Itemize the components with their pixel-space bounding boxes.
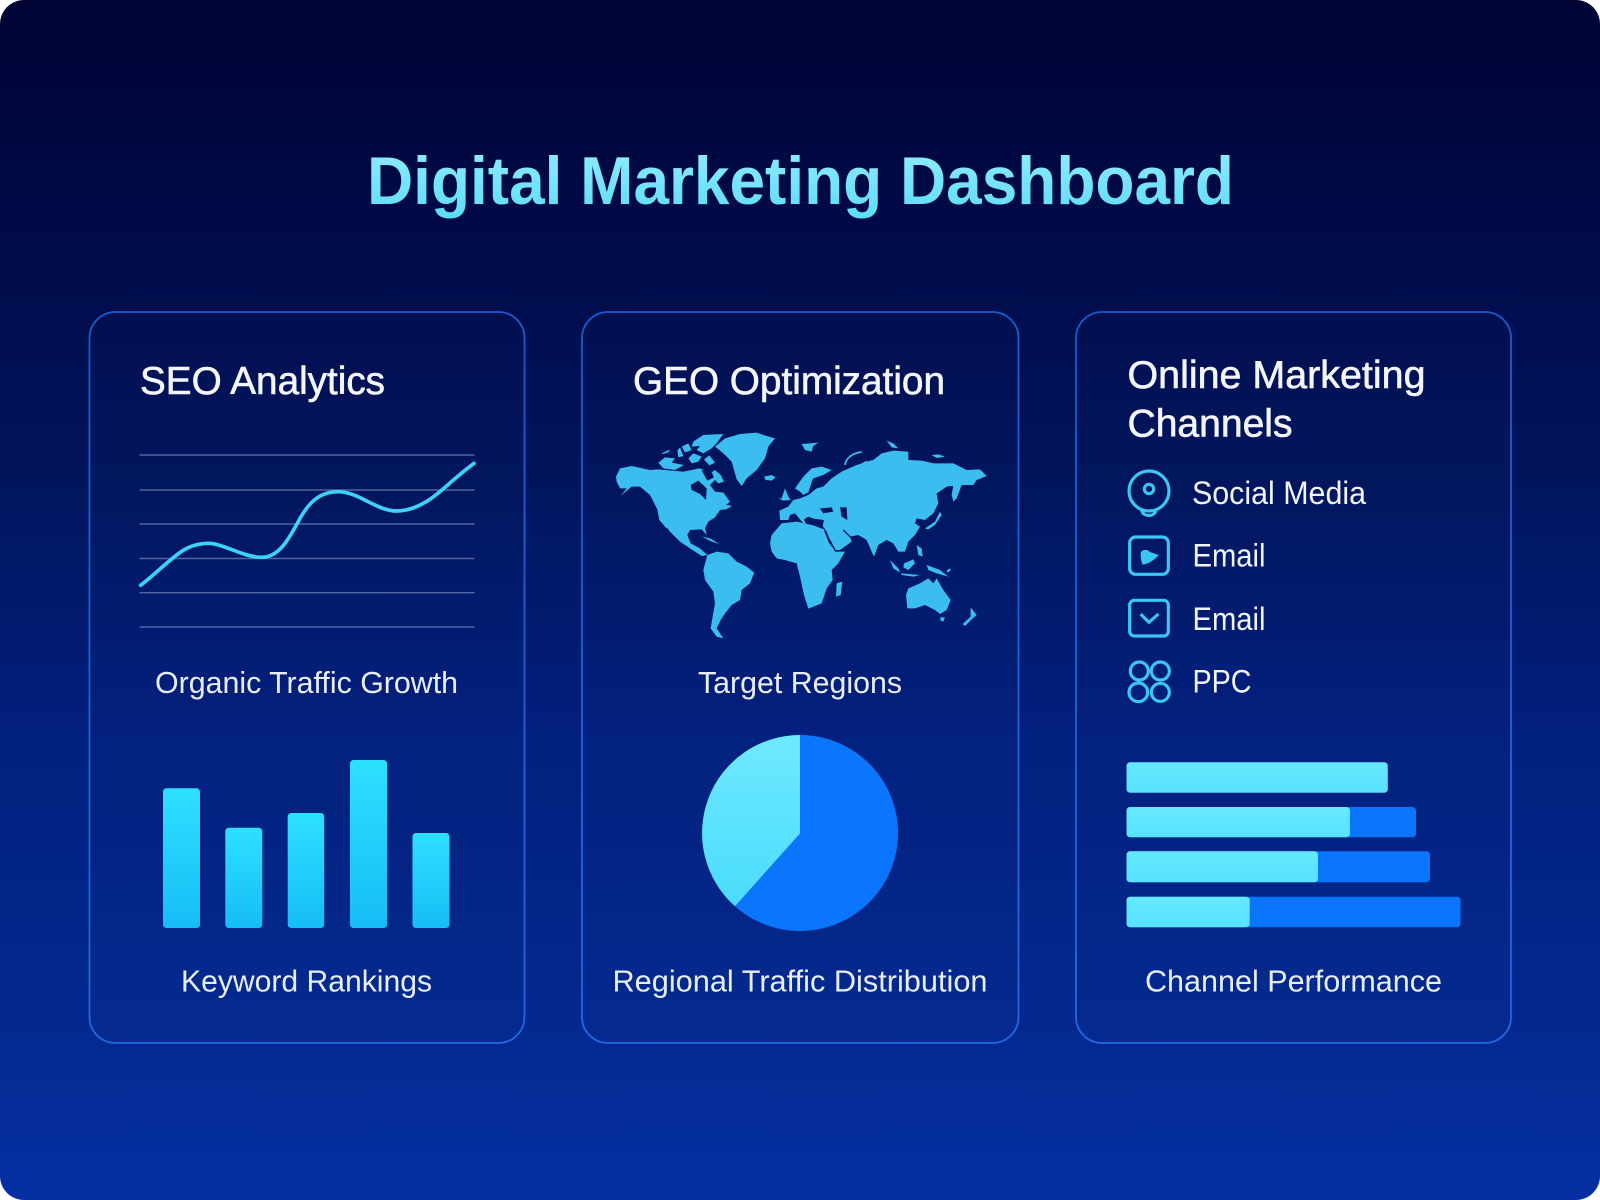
pie chart: regional distribution	[702, 735, 898, 931]
icon: email heart	[1130, 537, 1168, 574]
caption: Channel Performance: Channel Performance	[1145, 964, 1442, 998]
heading: Online Marketing Channels: Channels	[1128, 402, 1292, 446]
panel: GEO Optimization	[582, 312, 1018, 1043]
label: Social Media: Social Media	[1192, 475, 1366, 511]
panel: SEO Analytics	[90, 312, 524, 1043]
icon: email chevron	[1130, 600, 1168, 636]
line chart: organic traffic	[140, 455, 474, 627]
label: Email second row: Email	[1192, 601, 1266, 637]
label: PPC: PPC	[1192, 664, 1252, 700]
bar chart: keyword rankings	[163, 760, 450, 928]
heading: GEO Optimization: GEO Optimization	[633, 360, 945, 403]
icon: social media	[1129, 471, 1169, 515]
caption: Organic Traffic Growth: Organic Traffic Growth	[155, 665, 458, 700]
title: Digital Marketing Dashboard	[367, 143, 1234, 219]
caption: Keyword Rankings: Keyword Rankings	[181, 964, 432, 998]
caption: Regional Traffic Distribution: Regional Traffic Distribution	[612, 964, 988, 998]
heading: Online Marketing Channels	[1128, 354, 1426, 446]
panel: Online Marketing Channels	[1076, 312, 1511, 1043]
icon: PPC circles	[1129, 662, 1169, 702]
heading: SEO Analytics: SEO Analytics	[140, 360, 385, 403]
caption: Target Regions: Target Regions	[698, 665, 902, 700]
heading: Online Marketing Channels: Online Marketing	[1128, 354, 1426, 397]
world map	[616, 433, 987, 638]
horizontal bar chart: channel performance	[1126, 762, 1460, 927]
label: Email: Email	[1192, 538, 1266, 574]
